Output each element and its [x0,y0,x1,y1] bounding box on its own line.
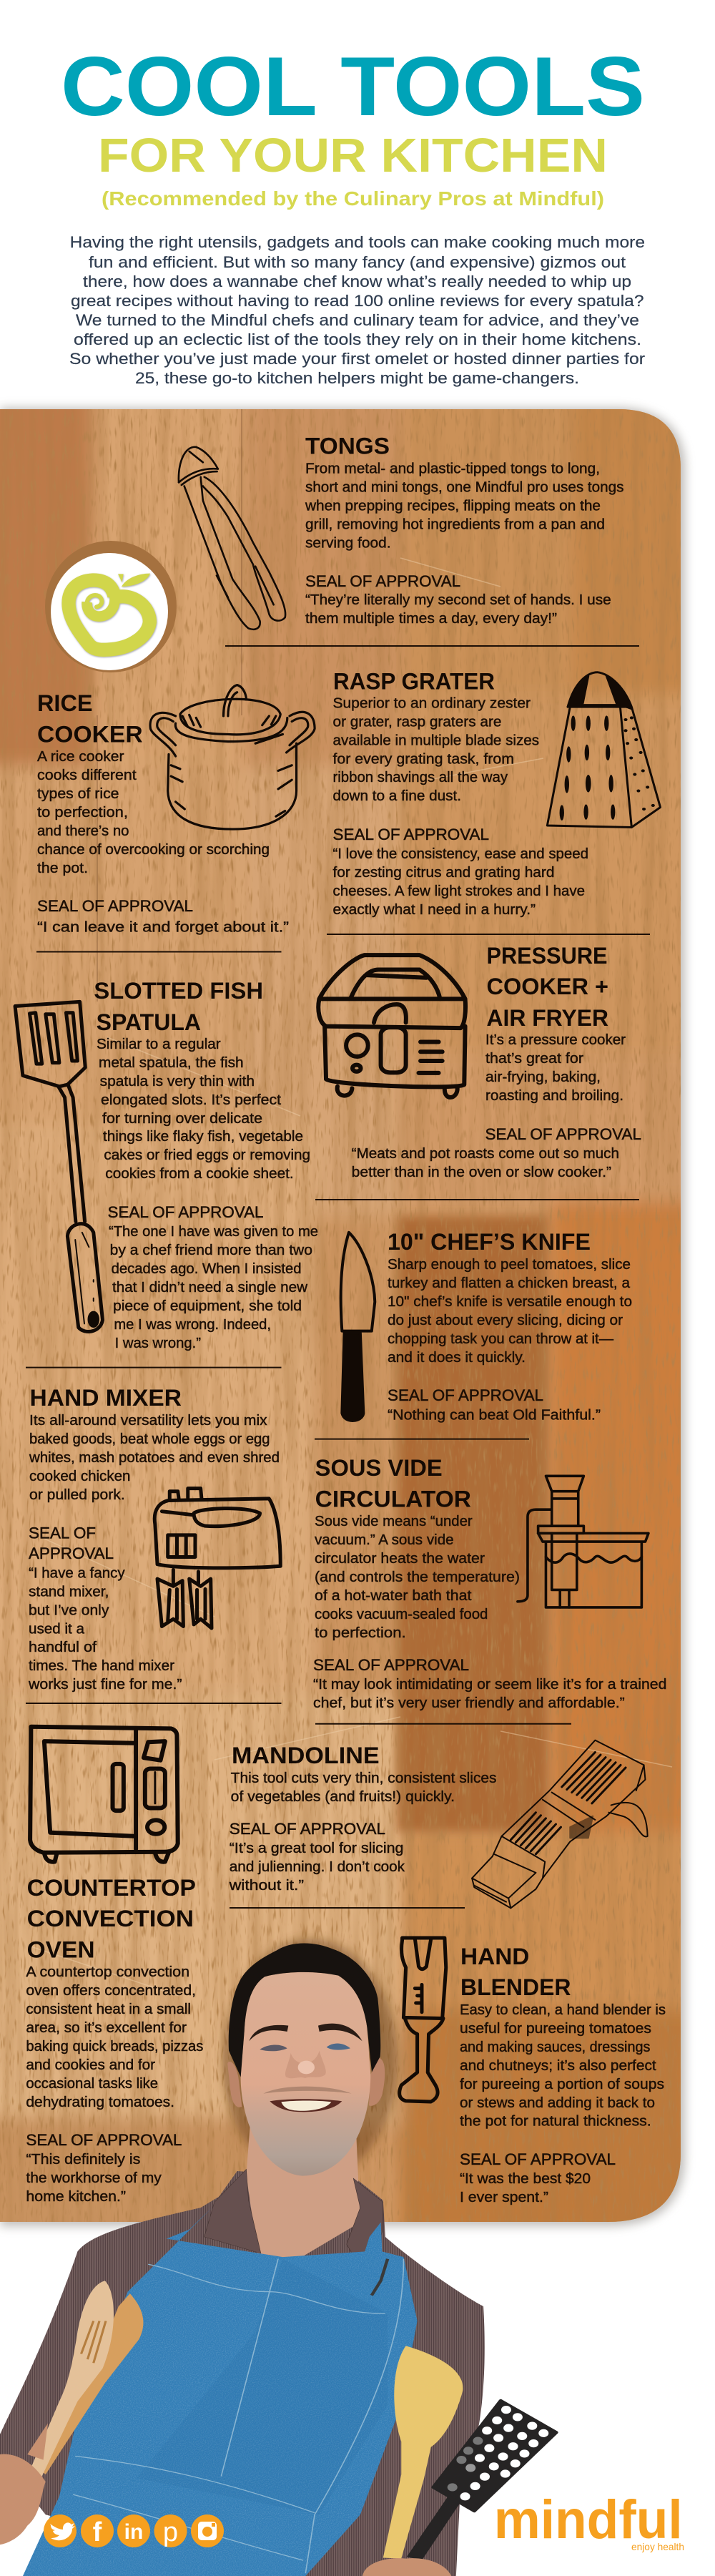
seal of approval: exactly what I need in a hurry.” [333,902,536,918]
icon: pinterest [154,2514,187,2547]
description: or stews and adding it back to [460,2095,655,2111]
eyes [260,2045,287,2051]
description: circulator heats the water [315,1551,485,1567]
intro text block: Having the right utensils, gadgets and tools can make cooking much more [70,233,645,251]
description: Superior to an ordinary zester [333,696,531,712]
icon: facebook: f [93,2517,102,2547]
panel: sous vide circulator [313,1455,666,1711]
seal of approval: that I didn’t need a single new [112,1280,308,1296]
apron [23,2208,418,2576]
panel: rice cooker [37,685,315,936]
description: serving food. [305,535,390,551]
intro text block: We turned to the Mindful chefs and culinary team for advice, and they’ve [76,311,639,329]
clip [372,2259,388,2296]
description: the pot for natural thickness. [460,2114,651,2130]
head [227,1943,385,2176]
icon: oven [30,1727,178,1862]
description: for every grating task, from [333,751,514,767]
description [231,1771,496,1805]
heading [460,1944,571,2000]
description: to perfection, [37,805,128,821]
seal of approval [460,2150,616,2205]
seal of approval: and julienning. I don’t cook [230,1859,405,1875]
description: and it does it quickly. [388,1350,526,1366]
seal of approval [28,1524,182,1693]
seal of approval: without it.” [229,1878,304,1894]
description: turkey and flatten a chicken breast, a [388,1275,631,1291]
description [26,1964,203,2110]
intro text block: So whether you’ve just made your first omelet or hosted dinner parties for [69,350,645,368]
seal of approval: by a chef friend more than two [110,1243,312,1258]
seal of approval: SEAL OF APPROVAL [333,826,489,843]
heading: HAND MIXER [30,1385,182,1411]
heading: HAND [460,1944,529,1969]
heading: COUNTERTOP [27,1875,196,1901]
description: vacuum.” A sous vide [315,1532,454,1548]
seal of approval: times. The hand mixer [29,1658,174,1674]
description [460,2002,666,2130]
seal of approval: SEAL OF APPROVAL [313,1656,469,1674]
description: chance of overcooking or scorching [37,842,270,858]
description: This tool cuts very thin, consistent slices [231,1771,496,1786]
description: available in multiple blade sizes [333,733,539,749]
social icons [44,2514,224,2547]
description: baking quick breads, pizzas [26,2039,203,2055]
mouth [270,2099,342,2112]
description: or pulled pork. [29,1487,125,1503]
black spatula [407,2401,556,2560]
subtitle: FOR YOUR KITCHEN [98,129,608,182]
description: and making sauces, dressings [460,2039,650,2055]
seal of approval: I ever spent.” [460,2190,548,2205]
icon: grater [547,672,661,828]
description: useful for pureeing tomatoes [460,2021,651,2037]
seal of approval: piece of equipment, she told [113,1298,302,1314]
heading: COOKER [37,722,143,748]
heading: SPATULA [97,1009,201,1035]
seal of approval: “I love the consistency, ease and speed [333,846,588,862]
seal of approval: “The one I have was given to me [109,1224,318,1240]
description: and chutneys; it’s also perfect [460,2058,656,2074]
panel: hand blender [400,1938,666,2205]
description: of a hot-water bath that [315,1588,472,1604]
description: oven offers concentrated, [26,1983,196,1999]
description: Its all-around versatility lets you mix [29,1413,267,1429]
seal of approval: SEAL OF APPROVAL [388,1386,543,1404]
panel: chef's knife [341,1229,632,1424]
heading: 10" CHEF’S KNIFE [388,1229,591,1255]
chef photo illustration [0,1939,556,2576]
icon: hand blender [400,1938,446,2102]
heading: AIR FRYER [486,1005,608,1031]
seal of approval: stand mixer, [29,1585,109,1600]
seal of approval: decades ago. When I insisted [112,1261,302,1277]
panel: pressure cooker + air fryer [318,943,641,1180]
heading: SLOTTED FISH [94,978,263,1004]
icon: sous vide circulator [518,1476,649,1607]
description: Sharp enough to peel tomatoes, slice [388,1257,631,1273]
description [37,749,270,876]
description: things like flaky fish, vegetable [103,1129,303,1145]
seal of approval: them multiple times a day, every day!” [305,611,557,627]
description: Easy to clean, a hand blender is [460,2002,666,2018]
intro text block: there, how does a wannabe chef know what’s really needed to whip up [83,273,631,290]
seal of approval [37,897,289,936]
description: to perfection. [315,1625,406,1641]
face [241,1972,370,2176]
description: down to a fine dust. [333,788,461,804]
neck [246,2112,360,2259]
description: From metal- and plastic-tipped tongs to long, [305,461,600,477]
icon: linkedin: in [124,2520,143,2544]
description: chopping task you can throw at it— [388,1331,613,1347]
hand right [363,2558,451,2576]
collar [204,2169,383,2283]
shirt [0,2171,485,2576]
heading: RASP GRATER [333,669,495,695]
heading: CIRCULATOR [315,1487,471,1512]
description: or grater, rasp graters are [333,715,502,730]
seal of approval: SEAL OF APPROVAL [485,1125,641,1143]
icon: mindful apple logo [69,574,150,650]
seal of approval: SEAL OF APPROVAL [107,1203,263,1221]
description: of vegetables (and fruits!) quickly. [231,1789,455,1805]
description: ribbon shavings all the way [333,770,508,785]
seal of approval: “It was the best $20 [460,2171,591,2187]
description: cookies from a cookie sheet. [105,1166,294,1182]
description: A rice cooker [37,749,124,765]
description: 10" chef’s knife is versatile enough to [388,1294,632,1310]
icon: pressure cooker [318,955,465,1097]
seal of approval [352,1125,641,1180]
seal of approval: handful of [29,1640,97,1655]
description: the pot. [37,861,88,876]
description: Sous vide means “under [315,1514,473,1529]
description: cooks vacuum-sealed food [315,1607,488,1622]
seal of approval: APPROVAL [29,1544,114,1562]
logo: mindful: enjoy health [631,2541,684,2552]
logo: mindful: mindful [494,2489,683,2550]
icon: hand mixer [154,1489,280,1628]
icon: twitter [44,2514,77,2547]
heading: COOKER + [486,974,608,999]
cutting board [0,386,701,2239]
description [315,1514,520,1641]
panel: mandoline [229,1740,648,1908]
seal of approval: “It’s a great tool for slicing [230,1841,403,1856]
seal of approval: for zesting citrus and grating hard [333,865,555,881]
description: Similar to a regular [97,1037,221,1052]
description: cooked chicken [29,1469,130,1484]
seal of approval: home kitchen.” [26,2189,126,2205]
description: baked goods, beat whole eggs or egg [29,1431,270,1447]
seal of approval [388,1386,601,1424]
description: cakes or fried eggs or removing [104,1147,310,1163]
seal of approval: the workhorse of my [26,2170,162,2186]
seal of approval: SEAL OF APPROVAL [26,2131,182,2149]
seal of approval: cheeses. A few light strokes and I have [333,883,585,899]
description: cooks different [37,768,137,783]
description: and there’s no [37,823,129,839]
description: for pureeing a portion of soups [460,2077,664,2092]
seal of approval: “It may look intimidating or seem like it’s for a trained [313,1677,666,1693]
seal of approval: but I’ve only [29,1603,109,1619]
seal of approval [26,2131,182,2205]
seal of approval: chef, but it’s very user friendly and affordable.” [313,1695,625,1711]
description: types of rice [37,786,119,802]
icon: spatula [15,1001,103,1331]
heading [37,690,143,748]
panel: countertop convection oven [26,1727,203,2205]
heading: SOUS VIDE [315,1455,443,1481]
description: roasting and broiling. [485,1088,623,1104]
seal of approval: me I was wrong. Indeed, [114,1317,271,1333]
description: air-frying, baking, [485,1069,601,1085]
description: spatula is very thin with [100,1074,255,1089]
heading: OVEN [27,1937,95,1963]
intro text block: great recipes without having to read 100 online reviews for every spatula? [71,292,644,310]
intro text block: 25, these go-to kitchen helpers might be game-changers. [135,369,579,387]
seal of approval: SEAL OF APPROVAL [230,1820,385,1838]
icon: mandoline slicer [472,1740,648,1908]
description [97,1037,310,1182]
brows [249,2024,363,2041]
wooden spoons [29,2281,463,2559]
smile crease [263,2087,352,2094]
description [388,1257,632,1366]
heading: PRESSURE [486,943,608,969]
seal of approval [313,1656,666,1711]
heading: CONVECTION [27,1906,194,1931]
seal of approval: “They’re literally my second set of hands. I use [305,592,611,608]
description [485,1032,626,1104]
description [305,461,623,551]
description: area, so it’s excellent for [26,2020,187,2036]
seal of approval: SEAL OF APPROVAL [305,572,460,590]
seal of approval: “Nothing can beat Old Faithful.” [388,1408,601,1424]
description: It’s a pressure cooker [485,1032,626,1048]
heading: TONGS [305,434,390,459]
seal of approval: SEAL OF APPROVAL [37,897,193,915]
description: elongated slots. It’s perfect [101,1092,281,1108]
seal of approval [229,1820,405,1894]
panel: hand mixer [28,1385,280,1693]
seal of approval: “Meats and pot roasts come out so much [352,1146,619,1162]
description [29,1413,280,1503]
heading: BLENDER [460,1974,571,2000]
description: whites, mash potatoes and even shred [29,1450,280,1466]
seal of approval: used it a [29,1622,85,1637]
seal of approval: “I have a fancy [29,1566,125,1582]
seal of approval [333,826,588,918]
seal of approval [107,1203,318,1351]
nose [285,2051,326,2078]
ears [227,2058,385,2107]
icon: pinterest: p [163,2517,178,2547]
tagline: (Recommended by the Culinary Pros at Mindful) [102,187,604,210]
heading [486,943,608,1031]
hair [229,1943,380,2077]
icon: tongs [179,447,285,630]
description: when prepping recipes, flipping meats on the [305,499,601,514]
intro text block: fun and efficient. But with so many fancy (and expensive) gizmos out [89,253,626,271]
heading [94,978,263,1035]
cutout hole with logo [45,541,177,672]
panel: slotted fish spatula [15,978,318,1351]
seal of approval: works just fine for me.” [28,1677,182,1693]
description [333,696,539,804]
description: occasional tasks like [26,2076,158,2092]
intro text block: offered up an eclectic list of the tools they rely on in their home kitchens. [74,330,641,348]
description: metal spatula, the fish [99,1055,244,1071]
description: short and mini tongs, one Mindful pro uses tongs [305,480,623,496]
heading [315,1455,471,1512]
intro text block [69,233,645,387]
description: consistent heat in a small [26,2002,191,2017]
hand left [0,2424,48,2545]
seal of approval: “This definitely is [26,2152,140,2168]
heading [27,1875,196,1963]
seal of approval: “I can leave it and forget about it.” [37,920,289,936]
panel: tongs [179,434,623,630]
description: A countertop convection [26,1964,189,1980]
seal of approval: SEAL OF [29,1524,96,1542]
seal of approval [305,572,611,627]
icon: knife [341,1233,375,1421]
heading: RICE [37,690,93,716]
icon: rice cooker pot [150,685,315,829]
panel: rasp grater [333,669,661,918]
description: for turning over delicate [102,1111,262,1127]
description: and cookies and for [26,2057,155,2073]
icon: instagram [191,2514,224,2547]
description: dehydrating tomatoes. [26,2095,174,2110]
description: that’s great for [485,1051,583,1067]
title: COOL TOOLS [61,39,645,133]
seal of approval: SEAL OF APPROVAL [460,2150,616,2168]
icon: linkedin [117,2514,150,2547]
description: grill, removing hot ingredients from a pan and [305,516,605,532]
heading: MANDOLINE [232,1743,380,1768]
icon: facebook [81,2514,114,2547]
seal of approval: better than in the oven or slow cooker.” [352,1165,611,1180]
description: do just about every slicing, dicing or [388,1313,623,1328]
description: (and controls the temperature) [315,1569,520,1585]
seal of approval: I was wrong.” [115,1336,201,1351]
